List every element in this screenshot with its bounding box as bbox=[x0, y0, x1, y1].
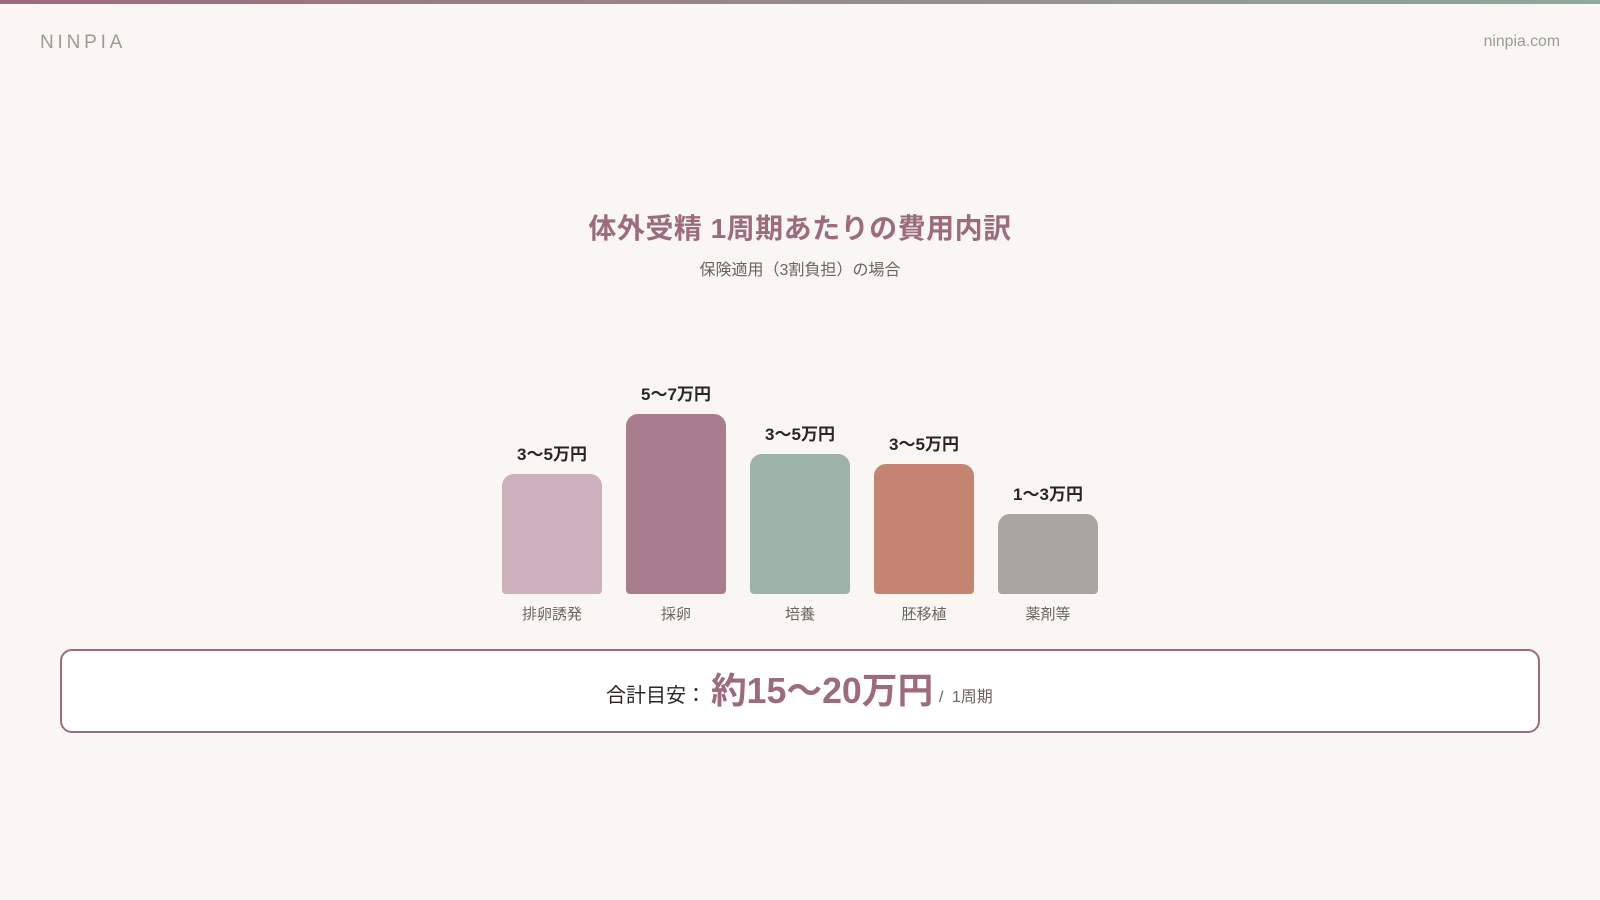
bar group: 培養: 培養 bbox=[785, 606, 815, 623]
logo: NINPIA: NINPIA bbox=[40, 32, 126, 53]
bar group: 採卵: 採卵 bbox=[661, 606, 691, 623]
bar group: 培養: 3〜5万円 bbox=[765, 425, 835, 444]
bar group: 培養 bbox=[750, 425, 850, 623]
title: 体外受精 1周期あたりの費用内訳 bbox=[588, 213, 1012, 244]
bar group: 採卵: 5〜7万円 bbox=[641, 385, 711, 404]
bar group: 薬剤等: 薬剤等 bbox=[1025, 606, 1070, 623]
total value: 約15〜20万円 bbox=[711, 671, 933, 711]
bar group: 薬剤等: 1〜3万円 bbox=[1013, 485, 1083, 504]
bar group: 採卵 bbox=[626, 385, 726, 623]
bar group: 胚移植 bbox=[874, 435, 974, 623]
per cycle note: / 1周期 bbox=[939, 689, 993, 706]
subtitle: 保険適用（3割負担）の場合 bbox=[700, 262, 900, 279]
site url: ninpia.com bbox=[1484, 33, 1560, 50]
total label: 合計目安： bbox=[606, 685, 706, 707]
bar group: 排卵誘発: 排卵誘発 bbox=[522, 606, 582, 623]
bar group: 胚移植: 胚移植 bbox=[901, 606, 946, 623]
bar group: 胚移植: 3〜5万円 bbox=[889, 435, 959, 454]
bar chart bbox=[502, 385, 1098, 623]
total callout box bbox=[60, 649, 1540, 733]
top gradient bar bbox=[0, 0, 1600, 4]
bar group: 排卵誘発 bbox=[502, 445, 602, 623]
bar group: 薬剤等 bbox=[998, 485, 1098, 623]
bar group: 排卵誘発: 3〜5万円 bbox=[517, 445, 587, 464]
